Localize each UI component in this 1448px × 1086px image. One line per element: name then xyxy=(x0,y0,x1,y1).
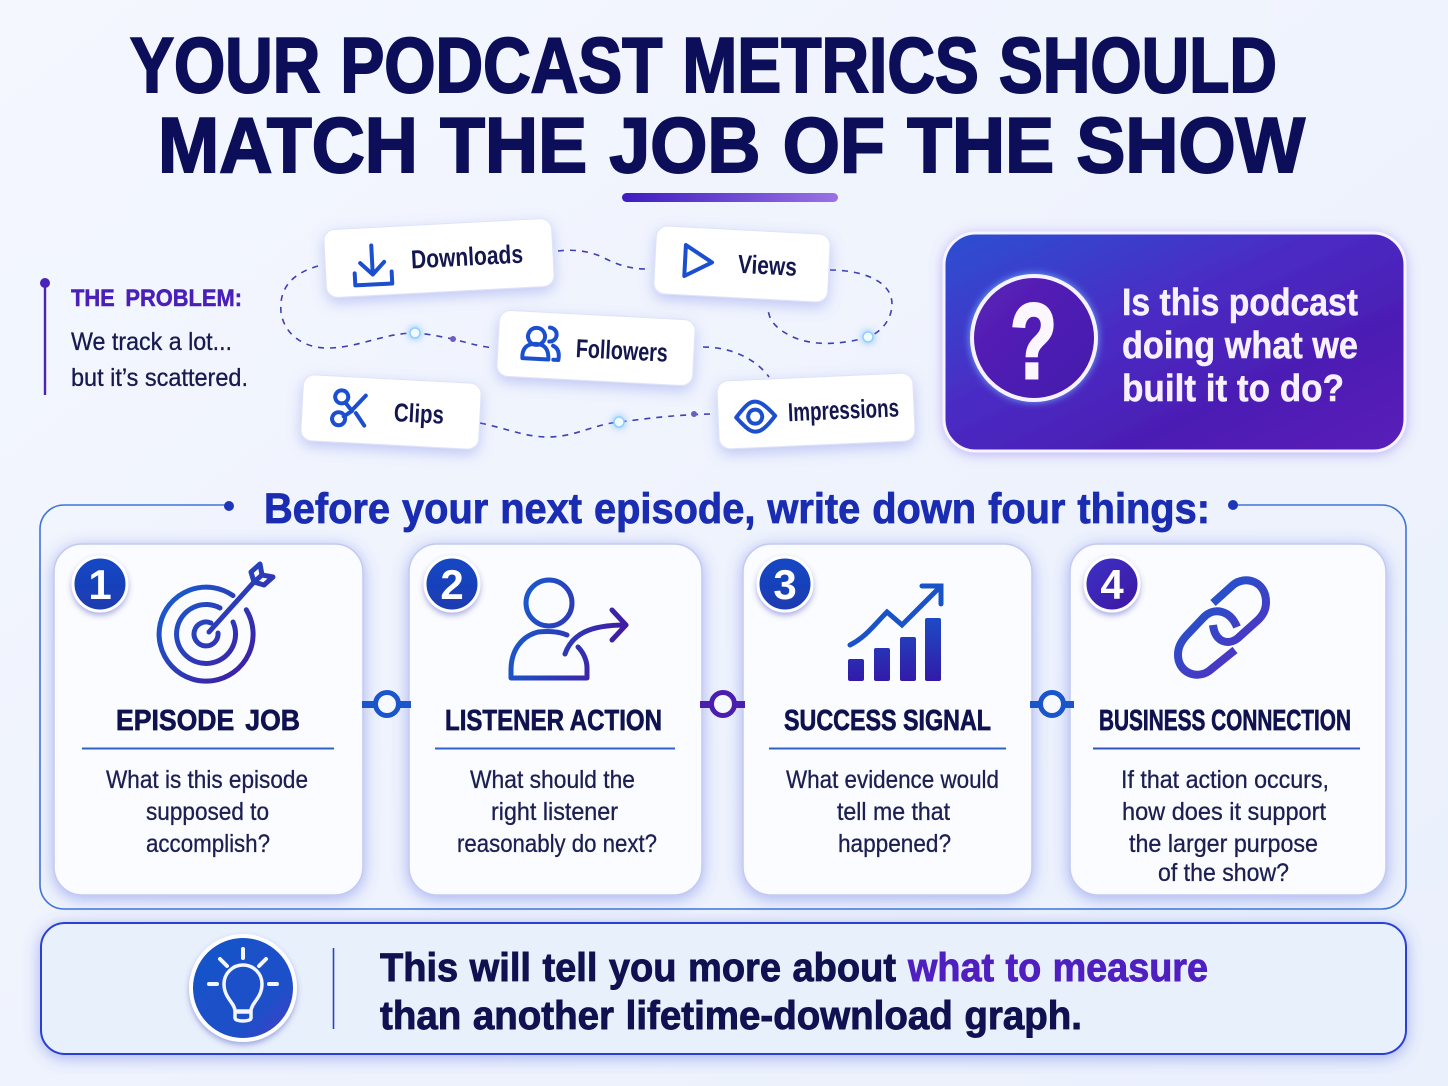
icon: rising bar chart xyxy=(848,586,941,681)
icon: question mark: ? xyxy=(1010,281,1057,401)
callout: key question: Is this podcast xyxy=(1122,282,1358,324)
connector: card 1 to 2 xyxy=(362,692,411,716)
card 4: business connection: of the show? xyxy=(1158,859,1289,887)
badge 4: 4 xyxy=(1100,561,1124,608)
title: YOUR PODCAST METRICS SHOULD xyxy=(130,21,1277,109)
badge 2 xyxy=(425,557,479,611)
icon: followers xyxy=(522,326,560,360)
connector: card 2 to 3 xyxy=(700,692,745,716)
takeaway text: what to measure xyxy=(907,946,1208,990)
card 4: business connection: If that action occurs, xyxy=(1121,766,1329,794)
card 4: business connection: BUSINESS CONNECTION xyxy=(1099,705,1351,737)
card 3: success signal xyxy=(743,544,1032,895)
icon: eye xyxy=(736,401,776,432)
card 2: listener action: reasonably do next? xyxy=(457,830,657,858)
metric chip: Views: Views xyxy=(737,249,798,282)
icon: target with arrow xyxy=(159,564,273,681)
text block: the problem: THE PROBLEM: xyxy=(71,285,242,312)
card 2: listener action: What should the xyxy=(470,766,635,794)
panel frame: four things xyxy=(40,505,1406,909)
card 3: success signal: SUCCESS SIGNAL xyxy=(784,705,991,737)
card 4: business connection: how does it support xyxy=(1122,798,1326,826)
badge 4 xyxy=(1085,557,1139,611)
card 1: episode job: accomplish? xyxy=(146,830,270,858)
icon: person with arrow xyxy=(511,580,626,678)
takeaway text xyxy=(380,946,1208,1038)
card 3: success signal: tell me that xyxy=(837,798,950,826)
metric chip: Downloads: Downloads xyxy=(410,239,524,274)
card 2: listener action: LISTENER ACTION xyxy=(445,705,662,737)
card 4: business connection xyxy=(1070,544,1386,895)
metric chip: Impressions xyxy=(717,373,915,449)
title underline xyxy=(622,193,838,202)
metric chip: Followers: Followers xyxy=(575,333,669,368)
card 3: success signal: What evidence would xyxy=(786,766,999,794)
card 1: episode job: What is this episode xyxy=(106,766,308,794)
metric chip: Views xyxy=(653,225,831,303)
card 1: episode job xyxy=(54,544,363,895)
dashed connectors between scattered metrics xyxy=(281,250,892,437)
badge 3 xyxy=(758,557,812,611)
callout: key question: doing what we xyxy=(1122,325,1358,367)
badge 1: 1 xyxy=(88,561,112,608)
metric chip: Downloads xyxy=(323,218,555,298)
callout: key question xyxy=(944,233,1405,451)
metric chip: Clips: Clips xyxy=(393,397,445,430)
connector: card 3 to 4 xyxy=(1030,692,1074,716)
badge 1 xyxy=(73,557,127,611)
text block: the problem xyxy=(40,278,248,395)
panel: takeaway xyxy=(41,923,1406,1054)
card 3: success signal: happened? xyxy=(838,830,951,858)
card 2: listener action xyxy=(409,544,702,895)
card 4: business connection: the larger purpose xyxy=(1129,830,1318,858)
takeaway text: than another lifetime-download graph. xyxy=(380,994,1082,1038)
badge 2: 2 xyxy=(440,561,464,608)
text block: the problem: We track a lot... xyxy=(71,328,232,356)
title xyxy=(130,21,1305,189)
icon: download xyxy=(353,245,392,285)
icon: question mark xyxy=(972,276,1096,401)
card 1: episode job: EPISODE JOB xyxy=(116,705,300,737)
metric chip: Impressions: Impressions xyxy=(787,392,900,427)
badge 3: 3 xyxy=(773,561,797,608)
heading: four things: Before your next episode, write down four things: xyxy=(264,485,1210,533)
card 1: episode job: supposed to xyxy=(146,798,269,826)
icon: chain link xyxy=(1178,580,1266,675)
callout: key question: built it to do? xyxy=(1122,368,1344,410)
metric chip: Clips xyxy=(300,374,482,450)
takeaway text: This will tell you more about xyxy=(380,946,896,990)
text block: the problem: but it’s scattered. xyxy=(71,364,248,392)
icon: play xyxy=(684,245,713,277)
metric chip: Followers xyxy=(496,310,696,386)
icon: light bulb xyxy=(191,936,295,1040)
title: MATCH THE JOB OF THE SHOW xyxy=(158,101,1305,189)
icon: scissors xyxy=(332,390,366,427)
card 2: listener action: right listener xyxy=(491,798,618,826)
